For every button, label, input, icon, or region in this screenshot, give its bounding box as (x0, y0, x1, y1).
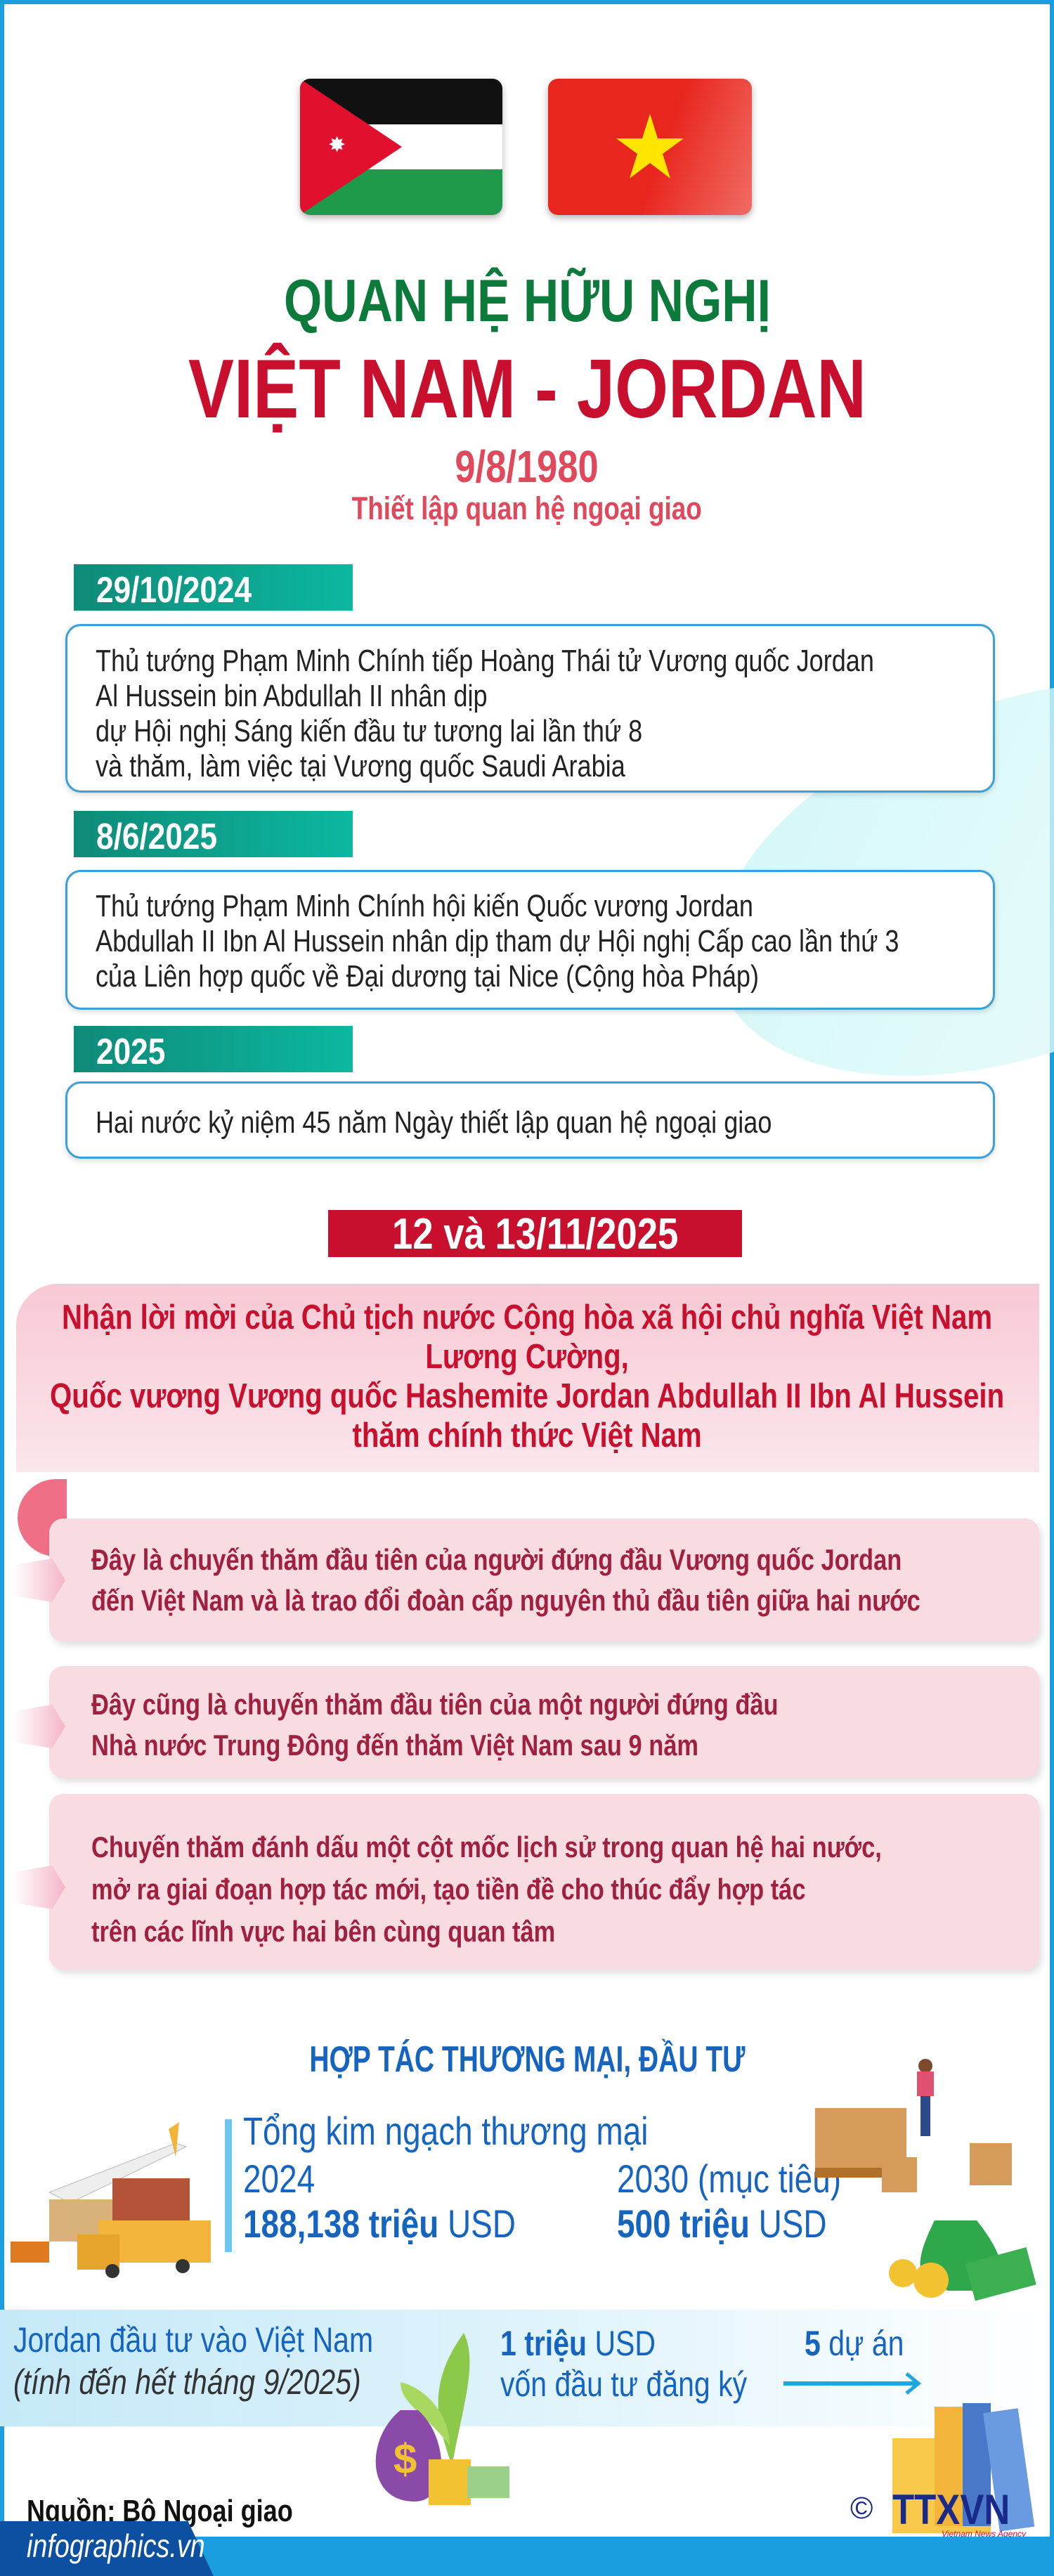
trade value block: 188,138 triệu USD (243, 2201, 516, 2246)
investment capital (500, 2324, 747, 2404)
trade value block: 2024 (243, 2157, 315, 2201)
logo: TTXVN: Vietnam News Agency (942, 2529, 1026, 2539)
title line 2: VIỆT NAM - JORDAN (188, 342, 866, 436)
trade value block: 2030 (mục tiêu) (617, 2157, 841, 2201)
marker 2 (18, 1705, 65, 1748)
footer bar (0, 2537, 1054, 2576)
pink panel: invitation: Lương Cường, (425, 1338, 629, 1376)
pink panel: invitation (16, 1284, 1039, 1472)
logo: TTXVN (850, 2486, 1026, 2539)
box: event 6/2025: Abdullah II Ibn Al Hussein nhân dịp tham dự Hội nghị Cấp cao lần thứ 3 (96, 924, 899, 958)
red date banner (328, 1210, 742, 1257)
icon: money bag with plant (375, 2333, 509, 2505)
box: event 6/2025: Thủ tướng Phạm Minh Chính hội kiến Quốc vương Jordan (96, 889, 753, 923)
box: event 2024: Al Hussein bin Abdullah II nhân dịp (96, 679, 488, 713)
project count: 5 dự án (805, 2324, 904, 2363)
heading: trade & investment: HỢP TÁC THƯƠNG MẠI, ĐẦU TƯ (309, 2039, 745, 2080)
logo: TTXVN: TTXVN (892, 2486, 1010, 2533)
flag: Jordan (300, 79, 502, 215)
arrow (783, 2372, 921, 2395)
card 1: Đây là chuyến thăm đầu tiên của người đứng đầu Vương quốc Jordan (91, 1543, 902, 1576)
footer bar: infographics.vn (27, 2528, 205, 2564)
red date banner: 12 và 13/11/2025 (392, 1210, 678, 1258)
pink panel: invitation: Quốc vương Vương quốc Hashemite Jordan Abdullah II Ibn Al Hussein (50, 1377, 1004, 1415)
tab: 8/6/2025 (74, 811, 353, 857)
established subtitle: Thiết lập quan hệ ngoại giao (352, 490, 702, 526)
box: event 6/2025: của Liên hợp quốc về Đại dương tại Nice (Cộng hòa Pháp) (96, 959, 759, 994)
card 2: Đây cũng là chuyến thăm đầu tiên của một người đứng đầu (91, 1688, 779, 1721)
investment label: (tính đến hết tháng 9/2025) (13, 2362, 361, 2402)
card 2: Nhà nước Trung Đông đến thăm Việt Nam sau 9 năm (91, 1729, 698, 1762)
box: event 2024: và thăm, làm việc tại Vương quốc Saudi Arabia (96, 749, 625, 783)
card 2 (49, 1666, 1039, 1778)
box: event 2024: Thủ tướng Phạm Minh Chính tiếp Hoàng Thái tử Vương quốc Jordan (96, 644, 874, 678)
marker 3 (18, 1866, 65, 1909)
pink panel: invitation: Nhận lời mời của Chủ tịch nước Cộng hòa xã hội chủ nghĩa Việt Nam (62, 1299, 992, 1336)
divider bar (225, 2119, 232, 2252)
pink panel: invitation: thăm chính thức Việt Nam (352, 1417, 702, 1455)
box: event 2024: dự Hội nghị Sáng kiến đầu tư tương lai lần thứ 8 (96, 714, 642, 748)
icon: money bag with plant: $ (393, 2435, 417, 2483)
card 3: mở ra giai đoạn hợp tác mới, tạo tiền đề cho thúc đẩy hợp tác (91, 1873, 805, 1906)
tab: 2025: 2025 (96, 1032, 165, 1072)
card 1 (49, 1518, 1039, 1641)
box: anniversary (65, 1081, 995, 1159)
investment capital: 1 triệu USD (500, 2324, 656, 2363)
flag: Vietnam (548, 79, 752, 215)
tab: 2025 (74, 1026, 353, 1072)
title line 1: QUAN HỆ HỮU NGHỊ (284, 268, 770, 334)
trade value block (243, 2109, 841, 2246)
logo: TTXVN: © (850, 2491, 873, 2525)
trade value block: 500 triệu USD (617, 2201, 827, 2246)
established date: 9/8/1980 (455, 441, 599, 492)
trade value block: Tổng kim ngạch thương mại (243, 2109, 648, 2153)
icon: folders (892, 2403, 1034, 2533)
investment capital: vốn đầu tư đăng ký (500, 2364, 747, 2404)
marker 1 (18, 1559, 65, 1602)
investment label (13, 2320, 373, 2402)
tab: 8/6/2025: 8/6/2025 (96, 817, 217, 857)
source: Nguồn: Bộ Ngoại giao (27, 2494, 293, 2528)
icon: logistics (11, 2122, 211, 2278)
card 3: trên các lĩnh vực hai bên cùng quan tâm (91, 1915, 555, 1948)
flag: Jordan: ✸ (328, 134, 346, 157)
box: event 6/2025 (65, 870, 995, 1010)
investment label: Jordan đầu tư vào Việt Nam (13, 2320, 373, 2360)
tab: 29/10/2024 (74, 564, 353, 611)
card 1: đến Việt Nam và là trao đổi đoàn cấp nguyên thủ đầu tiên giữa hai nước (91, 1584, 920, 1617)
box: event 2024 (65, 624, 995, 793)
decorative pink arc (18, 1479, 67, 1556)
box: anniversary: Hai nước kỷ niệm 45 năm Ngày thiết lập quan hệ ngoại giao (96, 1105, 772, 1140)
card 3 (49, 1794, 1039, 1970)
icon: warehouse workers and money (815, 2059, 1036, 2301)
tab: 29/10/2024: 29/10/2024 (96, 570, 252, 611)
card 3: Chuyến thăm đánh dấu một cột mốc lịch sử trong quan hệ hai nước, (91, 1830, 882, 1863)
background wave decoration (662, 605, 1054, 1152)
investment band (0, 2310, 1054, 2426)
